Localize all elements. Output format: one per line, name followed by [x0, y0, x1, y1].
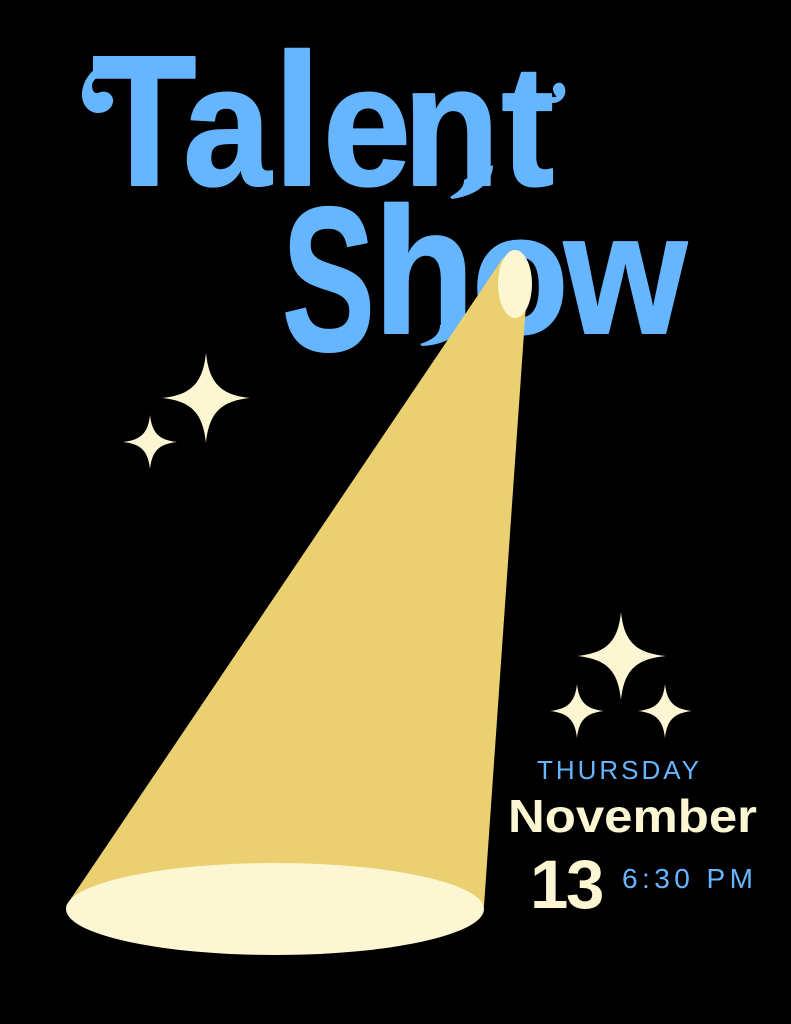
- event details: [508, 755, 757, 923]
- title line: Show: S: [282, 165, 375, 394]
- title line: Talent: e: [323, 30, 411, 222]
- title line: Talent: a: [183, 30, 272, 222]
- title line: Talent: [82, 15, 565, 226]
- star small right a: [550, 684, 604, 738]
- title line: Show: [282, 165, 687, 394]
- month: November: [508, 790, 757, 842]
- light beam: [66, 258, 527, 906]
- light pool: [66, 863, 484, 955]
- title line: Show: w: [563, 178, 687, 370]
- title: [82, 15, 687, 394]
- time: 6:30 PM: [622, 863, 753, 894]
- title line: Show: o: [472, 178, 569, 370]
- star small right b: [638, 684, 692, 738]
- date: 13: [530, 846, 604, 923]
- stars: [123, 353, 692, 738]
- title line: Talent: T: [92, 16, 197, 225]
- lamp lens: [498, 250, 532, 318]
- title line: Talent: t: [501, 30, 554, 222]
- title line: Talent: n: [403, 30, 500, 222]
- spotlight: [66, 250, 532, 955]
- title line: Talent: l: [273, 15, 321, 226]
- star large left: [162, 353, 250, 443]
- title line: Show: h: [374, 170, 475, 372]
- star large right: [577, 612, 666, 700]
- day: THURSDAY: [537, 755, 699, 785]
- star small left: [123, 415, 177, 469]
